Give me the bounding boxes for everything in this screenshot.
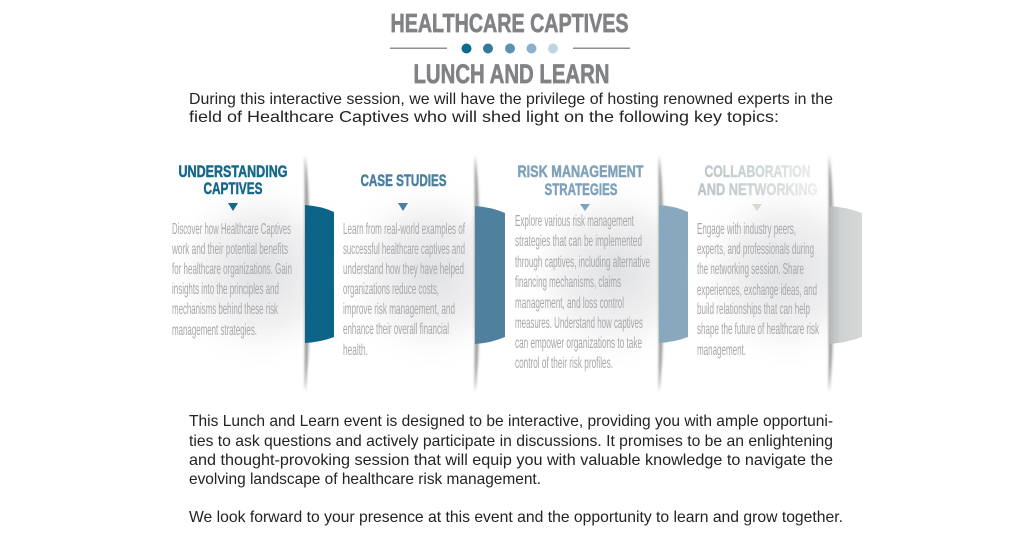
heading: Healthcare Captives: HEALTHCARE CAPTIVES	[390, 8, 628, 38]
body text: Engage with industry peers,	[697, 221, 796, 238]
body text: the networking session. Share	[697, 261, 804, 278]
closing paragraph: evolving landscape of healthcare risk management.	[189, 471, 541, 488]
closing paragraph: This Lunch and Learn event is designed to be interactive, providing you with ample opportuni-	[189, 413, 833, 430]
panel shading	[334, 157, 480, 390]
closing paragraph: ties to ask questions and actively participate in discussions. It promises to be an enlightening	[189, 433, 833, 450]
heading	[518, 163, 644, 199]
body text: management strategies.	[172, 322, 257, 339]
panel: understanding captives	[172, 157, 334, 390]
heading: CASE STUDIES	[360, 172, 446, 190]
body text: financing mechanisms, claims	[515, 274, 621, 291]
body text: strategies that can be implemented	[515, 233, 642, 250]
panel: case studies	[334, 157, 505, 390]
panel: understanding captives: for healthcare organizations. Gain	[172, 261, 292, 278]
heading: Lunch and Learn: LUNCH AND LEARN	[414, 59, 610, 89]
ribbon tab	[305, 205, 334, 343]
triangle marker	[752, 204, 762, 211]
body text: Learn from real-world examples of	[343, 221, 465, 238]
ribbon tab	[659, 205, 688, 343]
panel shading	[550, 157, 664, 390]
body text: Explore various risk management	[515, 213, 634, 230]
body text: health.	[343, 342, 368, 359]
heading: AND NETWORKING	[698, 181, 818, 199]
panel: collaboration and networking	[697, 157, 862, 390]
body text: experiences, exchange ideas, and	[697, 282, 817, 299]
heading	[178, 163, 288, 198]
triangle marker	[228, 203, 238, 211]
body text: build relationships that can help	[697, 301, 810, 318]
body text: through captives, including alternative	[515, 254, 650, 271]
closing paragraph	[189, 413, 833, 488]
body text: enhance their overall financial	[343, 321, 449, 338]
panel shading	[196, 157, 310, 390]
body text: experts, and professionals during	[697, 241, 814, 258]
body text: insights into the principles and	[172, 281, 279, 298]
panel: case studies: successful healthcare captives and	[343, 241, 465, 258]
triangle marker	[580, 204, 590, 211]
heading: RISK MANAGEMENT	[518, 163, 644, 181]
heading: CAPTIVES	[204, 180, 262, 198]
intro paragraph: During this interactive session, we will have the privilege of hosting renowned experts in the	[189, 91, 833, 108]
body text: organizations reduce costs,	[343, 281, 439, 298]
heading: STRATEGIES	[544, 181, 618, 199]
body text: improve risk management, and	[343, 301, 455, 318]
panel: risk management strategies	[515, 157, 688, 390]
body text: management, and loss control	[515, 295, 624, 312]
title block	[390, 8, 630, 89]
body text: shape the future of healthcare risk	[697, 321, 820, 338]
heading	[698, 163, 818, 199]
intro paragraph	[189, 91, 833, 126]
panel shading	[720, 157, 834, 390]
body text: work and their potential benefits	[171, 241, 288, 258]
body text: control of their risk profiles.	[515, 355, 613, 372]
body text	[343, 221, 465, 359]
ribbon tab	[475, 206, 505, 344]
heading: UNDERSTANDING	[178, 163, 288, 181]
body text	[697, 221, 820, 359]
intro paragraph: field of Healthcare Captives who will shed light on the following key topics:	[189, 109, 779, 126]
body text: understand how they have helped	[343, 261, 464, 278]
closing invitation: We look forward to your presence at this event and the opportunity to learn and grow together.	[189, 509, 843, 526]
triangle marker	[398, 203, 408, 211]
ribbon tab	[829, 206, 862, 344]
body text: can empower organizations to take	[515, 335, 642, 352]
body text: management.	[697, 342, 746, 359]
body text	[171, 221, 292, 339]
panel: understanding captives: Discover how Healthcare Captives	[172, 221, 291, 238]
divider with five dots	[390, 44, 630, 54]
closing paragraph: and thought-provoking session that will equip you with valuable knowledge to navigate the	[189, 452, 833, 469]
heading: COLLABORATION	[704, 163, 810, 181]
body text: mechanisms behind these risk	[172, 301, 278, 318]
body text	[515, 213, 650, 372]
body text: measures. Understand how captives	[515, 315, 643, 332]
